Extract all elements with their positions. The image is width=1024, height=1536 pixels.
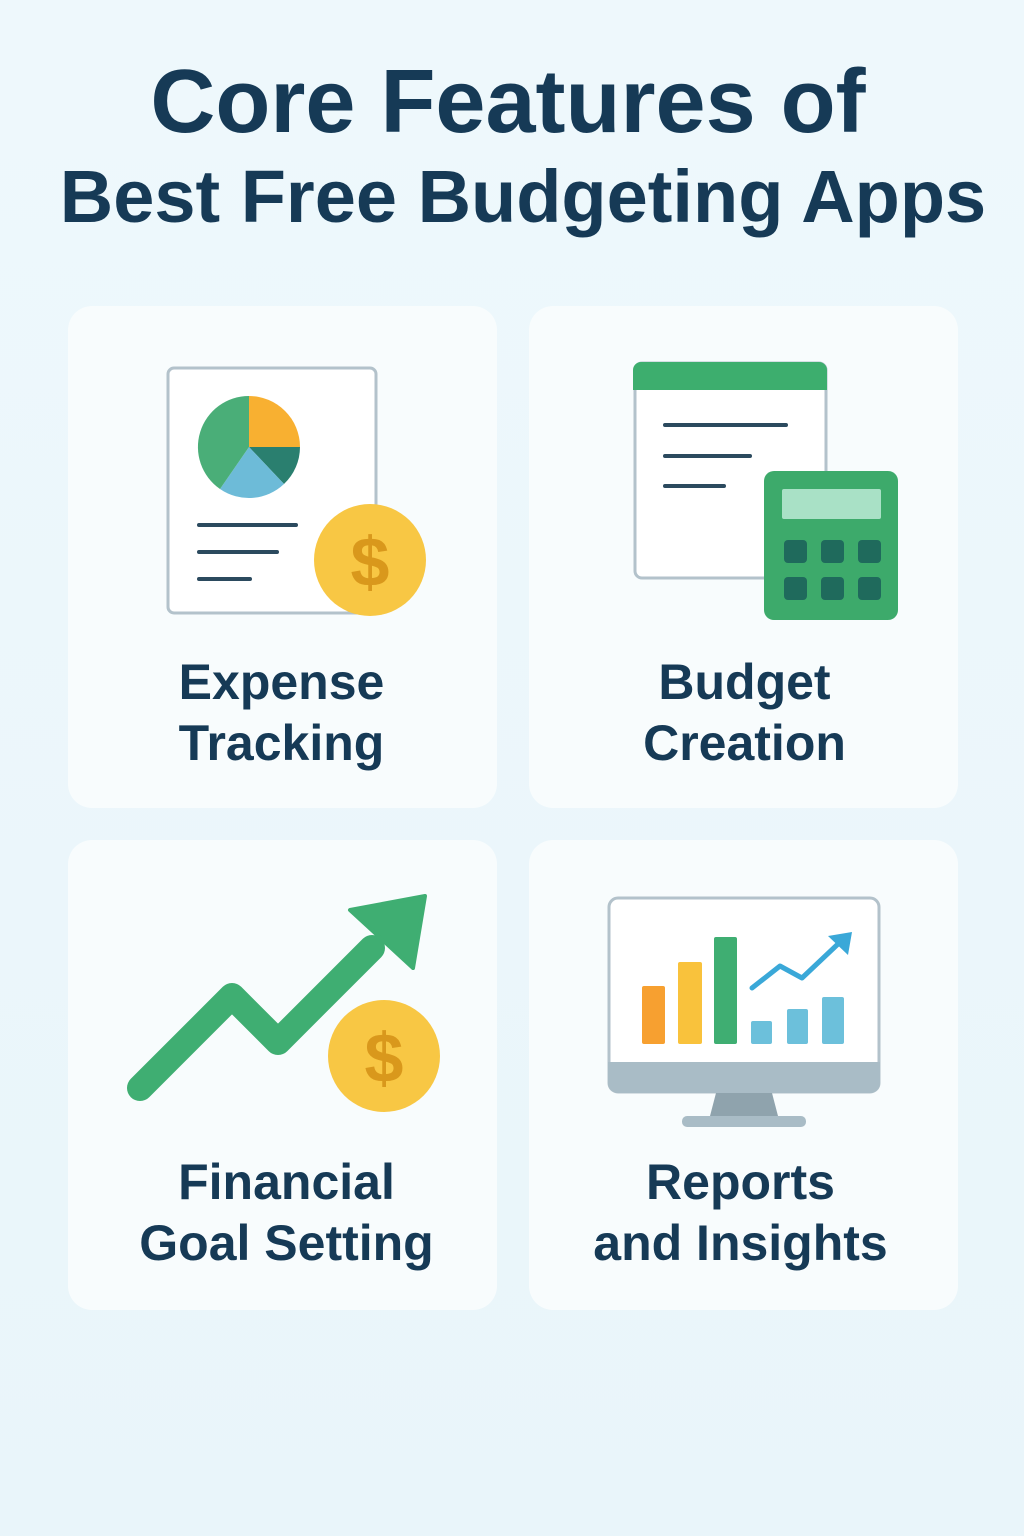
icon: growth arrow with coin: $ <box>365 1019 403 1097</box>
icon: document with pie chart and coin: $ <box>351 523 389 601</box>
icon: growth arrow with coin <box>127 894 440 1112</box>
label: Tracking <box>179 715 384 771</box>
panel: expense tracking <box>68 306 497 808</box>
panel: financial goal setting <box>68 840 497 1310</box>
label: and Insights <box>593 1215 888 1271</box>
icon: budget sheet and calculator <box>633 362 898 620</box>
icon: document with pie chart and coin <box>166 366 426 616</box>
label <box>139 1154 434 1271</box>
label: Financial <box>178 1154 395 1210</box>
icon: monitor with chart <box>608 896 880 1127</box>
label: Goal Setting <box>139 1215 434 1271</box>
label: Expense <box>179 654 384 710</box>
label <box>593 1154 888 1271</box>
title: Core Features of <box>150 52 866 152</box>
label <box>643 654 846 771</box>
label: Budget <box>658 654 831 710</box>
panel: budget creation <box>529 306 958 808</box>
title <box>60 52 986 238</box>
label <box>179 654 384 771</box>
label: Creation <box>643 715 846 771</box>
title: Best Free Budgeting Apps <box>60 155 986 238</box>
label: Reports <box>646 1154 835 1210</box>
panel: reports and insights <box>529 840 958 1310</box>
